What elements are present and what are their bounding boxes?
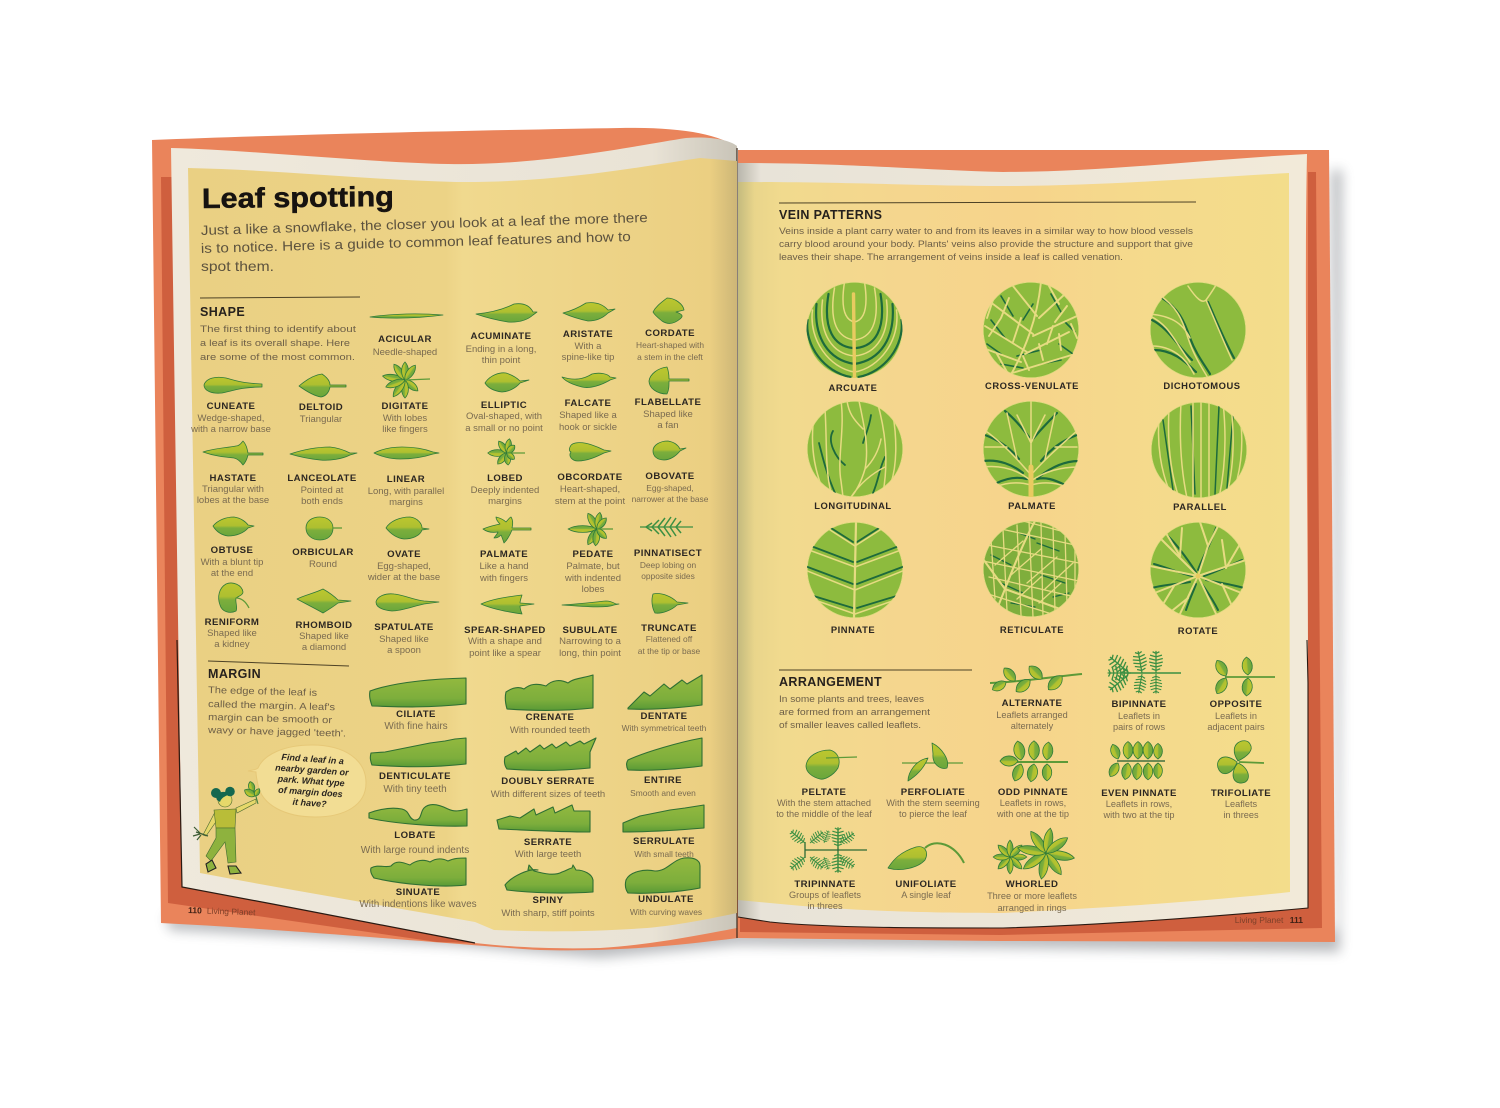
leaf: lobed: LOBED <box>487 473 523 484</box>
leaf: lobed <box>471 438 539 507</box>
vein: cross-venulate: CROSS-VENULATE <box>985 380 1079 391</box>
leaf: cuneate: Wedge-shaped, <box>198 413 264 424</box>
arrangement: alternate: ALTERNATE <box>1002 698 1063 709</box>
leaf: flabellate: Shaped like <box>643 409 693 420</box>
arrangement: opposite <box>1207 657 1275 732</box>
heading: arrangement: of smaller leaves called leaflets. <box>779 720 921 730</box>
arrangement: trifoliate: Leaflets <box>1225 799 1257 809</box>
leaf: cordate: Heart-shaped with <box>636 340 704 350</box>
heading: arrangement: are formed from an arrangement <box>779 707 931 717</box>
margin: undulate: With curving waves <box>630 907 702 917</box>
margin: lobate <box>361 805 469 856</box>
left cover <box>152 128 738 950</box>
leaf: palmate: Like a hand <box>479 561 529 572</box>
leaf: elliptic: ELLIPTIC <box>481 400 527 411</box>
leaf: acicular: Needle-shaped <box>373 347 437 358</box>
leaf: cuneate: CUNEATE <box>207 401 256 412</box>
margin: serrulate: SERRULATE <box>633 836 695 847</box>
vein: dichotomous <box>1150 282 1246 391</box>
right page yellow panel <box>738 173 1290 913</box>
leaf: spear-shaped: With a shape and <box>468 636 542 647</box>
arrangement: tripinnate: Groups of leaflets <box>789 890 861 900</box>
leaf: aristate: ARISTATE <box>563 329 613 340</box>
arrangement: odd pinnate: Leaflets in rows, <box>1000 798 1066 808</box>
margin: serrate: SERRATE <box>524 837 572 848</box>
arrangement: bipinnate: BIPINNATE <box>1111 699 1167 710</box>
leaf: orbicular: Round <box>309 559 337 570</box>
leaf: cordate <box>636 298 704 362</box>
heading: margin: MARGIN <box>208 667 261 681</box>
margin: entire <box>626 738 702 798</box>
leaf: linear: LINEAR <box>387 474 425 485</box>
heading: shape: The first thing to identify about <box>200 324 356 335</box>
arrangement: alternate: Leaflets arranged <box>996 710 1068 720</box>
arrangement: perfoliate: PERFOLIATE <box>901 787 965 798</box>
leaf: obcordate: stem at the point <box>555 496 625 507</box>
left page <box>152 128 738 950</box>
heading: vein patterns <box>779 202 1196 262</box>
intro text <box>201 210 648 274</box>
leaf: falcate: FALCATE <box>565 398 611 409</box>
vein: arcuate <box>806 282 902 393</box>
heading: vein patterns: Veins inside a plant carry water to and from its leaves in a similar way to how blood vessels <box>779 226 1194 236</box>
leaf: deltoid: DELTOID <box>299 402 343 413</box>
arrangement: trifoliate: TRIFOLIATE <box>1211 788 1271 799</box>
speech bubble: park. What type <box>276 774 345 788</box>
leaf: acuminate <box>466 304 537 366</box>
margin: lobate: LOBATE <box>394 830 436 841</box>
margin: undulate <box>625 858 702 917</box>
leaf: pinnatisect: opposite sides <box>641 571 695 581</box>
vein: palmate: PALMATE <box>1008 500 1056 511</box>
leaf: falcate: hook or sickle <box>559 422 617 433</box>
margin: crenate: CRENATE <box>526 712 575 723</box>
leaf: deltoid <box>299 374 346 425</box>
vein: arcuate: ARCUATE <box>829 382 877 393</box>
heading: margin <box>207 661 349 740</box>
leaf: rhomboid: RHOMBOID <box>296 620 352 631</box>
leaf: cordate: a stem in the cleft <box>637 352 703 362</box>
leaf: obovate: narrower at the base <box>632 494 709 504</box>
drop shadow <box>165 170 1342 958</box>
arrangement: whorled: arranged in rings <box>998 903 1067 913</box>
right page paper <box>738 154 1308 928</box>
leaf: rhomboid: a diamond <box>302 642 346 653</box>
leaf: flabellate: a fan <box>657 420 679 431</box>
margin: lobate: With large round indents <box>361 845 469 856</box>
leaf: acuminate: ACUMINATE <box>471 331 532 342</box>
margin: serrulate: With small teeth <box>634 849 694 859</box>
arrangement: whorled: Three or more leaflets <box>987 891 1077 901</box>
margin: doubly serrate <box>491 738 605 800</box>
title: Leaf spotting <box>202 181 394 214</box>
margin: denticulate <box>370 738 466 795</box>
heading: vein patterns: leaves their shape. The arrangement of veins inside a leaf is called venation. <box>779 252 1123 262</box>
vein: reticulate: RETICULATE <box>1000 624 1064 635</box>
leaf: lanceolate: both ends <box>301 496 343 507</box>
arrangement: even pinnate: EVEN PINNATE <box>1101 788 1177 799</box>
leaf: digitate: like fingers <box>382 424 428 435</box>
arrangement: odd pinnate: with one at the tip <box>996 809 1069 819</box>
arrangement: bipinnate: pairs of rows <box>1113 722 1165 732</box>
arrangement: even pinnate: Leaflets in rows, <box>1106 799 1172 809</box>
leaf: rhomboid <box>296 589 352 653</box>
leaf: obcordate: Heart-shaped, <box>560 484 620 495</box>
arrangement: trifoliate <box>1211 741 1271 820</box>
arrangement: perfoliate: With the stem seeming <box>886 798 980 808</box>
leaf: linear: Long, with parallel <box>368 486 444 497</box>
arrangement: peltate <box>776 750 872 819</box>
leaf: pedate: with indented <box>564 573 621 584</box>
leaf: subulate: Narrowing to a <box>559 636 622 647</box>
leaf: digitate: With lobes <box>383 413 427 424</box>
leaf: cuneate: with a narrow base <box>190 424 271 435</box>
leaf: subulate: long, thin point <box>559 648 621 659</box>
right cover <box>738 150 1335 942</box>
arrangement: peltate: to the middle of the leaf <box>776 809 872 819</box>
arrangement: opposite: adjacent pairs <box>1207 722 1265 732</box>
leaf: acicular: ACICULAR <box>378 334 432 345</box>
vein: pinnate: PINNATE <box>831 624 875 635</box>
margin: sinuate <box>359 858 477 910</box>
leaf: ovate: OVATE <box>387 549 421 560</box>
speech bubble: nearby garden or <box>275 762 349 778</box>
margin: spiny: SPINY <box>532 895 564 906</box>
leaf: reniform <box>205 583 259 650</box>
leaf: palmate: with fingers <box>479 573 528 584</box>
leaf: aristate: With a <box>575 341 602 352</box>
arrangement: perfoliate: to pierce the leaf <box>899 809 967 819</box>
leaf: pinnatisect: PINNATISECT <box>634 548 702 559</box>
intro text: is to notice. Here is a guide to common leaf features and how to <box>201 229 631 256</box>
heading: vein patterns: VEIN PATTERNS <box>779 208 882 222</box>
leaf: orbicular: ORBICULAR <box>292 547 354 558</box>
arrangement: unifoliate <box>888 843 964 900</box>
leaf: hastate <box>197 441 269 506</box>
margin: serrulate <box>623 805 704 859</box>
leaf: truncate: at the tip or base <box>638 646 701 656</box>
leaf: obovate: OBOVATE <box>645 471 695 482</box>
arrangement: tripinnate: in threes <box>807 901 843 911</box>
leaf: obcordate <box>555 443 625 507</box>
leaf: obtuse: at the end <box>211 568 253 579</box>
leaf: truncate: TRUNCATE <box>641 623 697 634</box>
leaf: obcordate: OBCORDATE <box>557 472 623 483</box>
folio: right: Living Planet 111 <box>1235 915 1303 925</box>
heading: margin: called the margin. A leaf's <box>208 699 335 713</box>
margin: dentate <box>622 675 707 733</box>
margin: serrate: With large teeth <box>515 849 581 860</box>
margin: spiny: With sharp, stiff points <box>501 908 595 919</box>
leaf: pinnatisect <box>634 517 702 581</box>
margin: ciliate <box>370 678 466 732</box>
illustration: child holding leaves <box>193 781 261 874</box>
speech bubble: of margin does <box>278 785 343 799</box>
leaf: linear <box>368 447 444 508</box>
leaf: obtuse: OBTUSE <box>211 545 253 556</box>
arrangement: perfoliate <box>886 743 980 819</box>
speech bubble <box>248 745 366 817</box>
heading: margin: margin can be smooth or <box>208 712 333 726</box>
leaf: rhomboid: Shaped like <box>299 631 349 642</box>
vein: palmate <box>983 401 1079 511</box>
book spread <box>152 128 1349 964</box>
arrangement: odd pinnate: ODD PINNATE <box>998 787 1068 798</box>
leaf: lobed: Deeply indented <box>471 485 539 496</box>
heading: vein patterns: carry blood around your body. Plants' veins also provide the structure and support that give <box>779 239 1193 249</box>
leaf: lobed: margins <box>488 496 522 507</box>
arrangement: tripinnate: TRIPINNATE <box>794 879 856 890</box>
vein: rotate: ROTATE <box>1178 625 1218 636</box>
arrangement: alternate <box>990 663 1082 731</box>
speech bubble: it have? <box>292 797 327 809</box>
leaf: truncate <box>638 594 701 656</box>
margin: crenate <box>505 675 593 736</box>
margin: ciliate: CILIATE <box>396 709 436 720</box>
leaf: digitate <box>382 362 430 435</box>
margin: undulate: UNDULATE <box>638 894 694 905</box>
leaf: elliptic: a small or no point <box>465 423 543 434</box>
leaf: flabellate: FLABELLATE <box>635 397 701 408</box>
leaf: aristate <box>562 303 615 363</box>
heading: shape: a leaf is its overall shape. Here <box>200 338 350 349</box>
margin: sinuate: With indentions like waves <box>359 899 477 910</box>
leaf: spear-shaped: point like a spear <box>469 648 541 659</box>
margin: ciliate: With fine hairs <box>384 721 448 732</box>
vein: pinnate <box>805 522 905 635</box>
vein: longitudinal <box>807 401 903 511</box>
arrangement: opposite: Leaflets in <box>1215 711 1257 721</box>
arrangement: tripinnate <box>787 827 867 911</box>
leaf: cordate: CORDATE <box>645 328 695 339</box>
leaf: acuminate: Ending in a long, <box>466 344 536 355</box>
heading: arrangement <box>779 670 972 730</box>
margin: entire: ENTIRE <box>644 775 682 786</box>
leaf: flabellate <box>635 367 701 431</box>
heading: shape: SHAPE <box>200 305 245 319</box>
arrangement: whorled: WHORLED <box>1006 879 1058 890</box>
leaf: pinnatisect: Deep lobing on <box>640 560 697 570</box>
leaf: hastate: HASTATE <box>209 473 257 484</box>
leaf: obovate: Egg-shaped, <box>646 483 694 493</box>
leaf: reniform: RENIFORM <box>205 617 259 628</box>
margin: denticulate: With tiny teeth <box>383 784 447 795</box>
right page <box>738 150 1335 942</box>
vein: parallel <box>1151 402 1247 512</box>
leaf: deltoid: Triangular <box>300 414 342 425</box>
vein: cross-venulate <box>983 282 1079 391</box>
arrangement: even pinnate <box>1101 742 1177 820</box>
leaf: pedate: lobes <box>582 584 605 595</box>
leaf: lanceolate <box>287 447 357 507</box>
leaf: spear-shaped <box>464 595 546 659</box>
vein: reticulate <box>983 521 1079 635</box>
leaf: falcate: Shaped like a <box>559 410 617 421</box>
margin: doubly serrate: With different sizes of teeth <box>491 789 605 800</box>
speech bubble: Find a leaf in a <box>281 752 344 766</box>
arrangement: peltate: PELTATE <box>802 787 847 798</box>
arrangement: bipinnate <box>1105 650 1181 732</box>
folio: left: 110 Living Planet <box>188 905 256 917</box>
margin: denticulate: DENTICULATE <box>379 771 451 782</box>
intro text: spot them. <box>201 259 274 274</box>
leaf: digitate: DIGITATE <box>382 401 429 412</box>
margin: sinuate: SINUATE <box>396 887 440 898</box>
leaf: elliptic: Oval-shaped, with <box>466 411 542 422</box>
leaf: pedate <box>564 512 621 595</box>
leaf: obtuse: With a blunt tip <box>201 557 263 568</box>
margin: crenate: With rounded teeth <box>510 725 590 736</box>
left page paper <box>171 137 737 948</box>
intro text: Just a like a snowflake, the closer you look at a leaf the more there <box>201 210 648 238</box>
leaf: reniform: Shaped like <box>207 628 257 639</box>
leaf: hastate: lobes at the base <box>197 495 269 506</box>
leaf: ovate <box>367 517 440 583</box>
arrangement: trifoliate: in threes <box>1223 810 1259 820</box>
leaf: orbicular <box>292 517 354 570</box>
arrangement: opposite: OPPOSITE <box>1210 699 1262 710</box>
leaf: cuneate <box>190 377 271 435</box>
vein: rotate <box>1150 522 1246 636</box>
leaf: obtuse <box>201 517 263 579</box>
leaf: spear-shaped: SPEAR-SHAPED <box>464 625 546 636</box>
heading: shape <box>200 297 360 363</box>
arrangement: unifoliate: A single leaf <box>901 890 951 900</box>
leaf: spatulate: a spoon <box>387 645 421 656</box>
heading: margin: wavy or have jagged 'teeth'. <box>207 725 346 740</box>
leaf: acicular <box>370 314 443 358</box>
leaf: subulate: SUBULATE <box>562 625 618 636</box>
leaf: spatulate: Shaped like <box>379 634 429 645</box>
margin: spiny <box>501 865 595 919</box>
vein: parallel: PARALLEL <box>1173 501 1227 512</box>
leaf: palmate: PALMATE <box>480 549 528 560</box>
heading: arrangement: ARRANGEMENT <box>779 675 882 689</box>
leaf: acuminate: thin point <box>482 355 521 366</box>
arrangement: peltate: With the stem attached <box>777 798 871 808</box>
leaf: lanceolate: Pointed at <box>301 485 344 496</box>
arrangement: odd pinnate <box>996 740 1069 819</box>
arrangement: alternate: alternately <box>1011 721 1054 731</box>
left page yellow panel <box>188 158 737 931</box>
vein: dichotomous: DICHOTOMOUS <box>1163 380 1241 391</box>
leaf: spatulate: SPATULATE <box>374 622 434 633</box>
leaf: pedate: PEDATE <box>573 549 614 560</box>
margin: serrate <box>497 805 590 860</box>
heading: arrangement: In some plants and trees, leaves <box>779 694 925 704</box>
margin: dentate: DENTATE <box>640 711 688 722</box>
margin: doubly serrate: DOUBLY SERRATE <box>501 776 595 787</box>
leaf: subulate <box>559 601 622 659</box>
leaf: obovate <box>632 441 709 504</box>
leaf: lanceolate: LANCEOLATE <box>287 473 357 484</box>
arrangement: bipinnate: Leaflets in <box>1118 711 1160 721</box>
heading: shape: are some of the most common. <box>200 352 355 363</box>
leaf: truncate: Flattened off <box>646 634 693 644</box>
leaf: elliptic <box>465 373 543 434</box>
leaf: linear: margins <box>389 497 423 508</box>
margin: entire: Smooth and even <box>630 788 696 798</box>
arrangement: even pinnate: with two at the tip <box>1103 810 1174 820</box>
heading: margin: The edge of the leaf is <box>208 685 317 699</box>
leaf: palmate <box>479 517 531 584</box>
leaf: ovate: wider at the base <box>367 572 440 583</box>
leaf: hastate: Triangular with <box>202 484 264 495</box>
margin: dentate: With symmetrical teeth <box>622 723 707 733</box>
leaf: aristate: spine-like tip <box>562 352 614 363</box>
leaf: ovate: Egg-shaped, <box>377 561 431 572</box>
leaf: falcate <box>559 373 617 433</box>
leaf: reniform: a kidney <box>214 639 250 650</box>
leaf: spatulate <box>374 594 439 656</box>
arrangement: whorled <box>987 827 1077 913</box>
arrangement: unifoliate: UNIFOLIATE <box>895 879 957 890</box>
leaf: pedate: Palmate, but <box>566 561 620 572</box>
vein: longitudinal: LONGITUDINAL <box>814 500 892 511</box>
